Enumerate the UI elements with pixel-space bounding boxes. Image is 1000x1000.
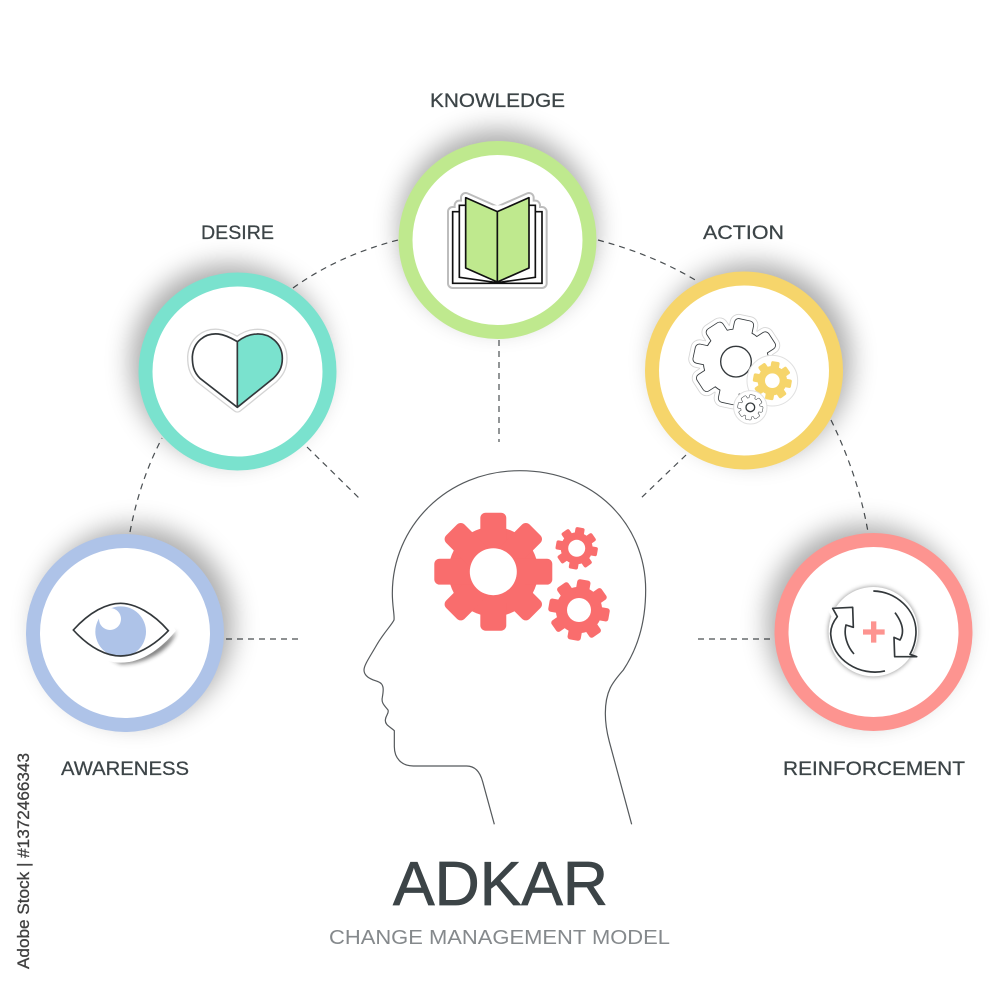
panel: awareness	[33, 526, 233, 725]
panel: desire	[131, 264, 330, 464]
icon: medium red gear	[544, 575, 614, 645]
label: awareness: AWARENESS	[61, 759, 189, 780]
icon: heart	[192, 334, 282, 407]
icon: eye	[67, 597, 176, 664]
icon: gears	[686, 311, 798, 424]
label: knowledge: KNOWLEDGE	[430, 91, 565, 112]
vertical stock id text: Adobe Stock | #1372466343	[14, 753, 33, 969]
label: action: ACTION	[703, 223, 784, 244]
panel: knowledge	[400, 130, 596, 332]
subtitle: CHANGE MANAGEMENT MODEL	[329, 926, 670, 949]
head with gears	[364, 471, 646, 824]
panel: action	[652, 263, 851, 462]
head outline	[364, 471, 646, 824]
title: ADKAR	[393, 850, 608, 919]
icon: large red gear	[434, 513, 552, 631]
dashed connectors between circles and head	[130, 240, 868, 639]
icon: open book	[453, 198, 542, 283]
icon: small red gear	[552, 524, 601, 573]
label: desire: DESIRE	[201, 223, 274, 244]
label: reinforcement: REINFORCEMENT	[783, 759, 965, 780]
panel: reinforcement	[767, 525, 966, 724]
icon: refresh arrows with plus	[827, 586, 919, 677]
